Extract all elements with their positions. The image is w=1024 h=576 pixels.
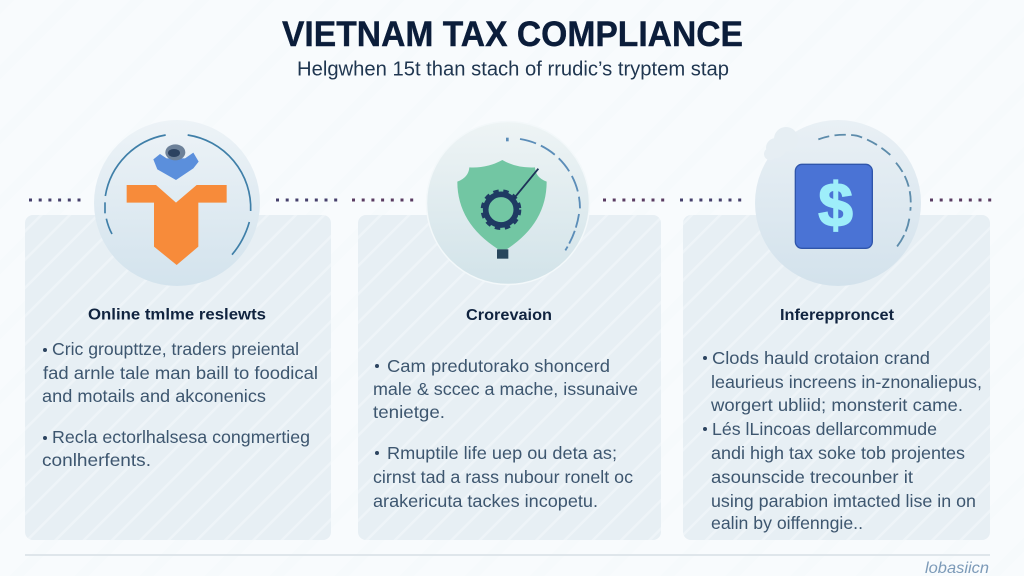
heading: crorevaion: Crorevaion (466, 307, 552, 324)
bullet text: inferepronet: using parabion imtacted lise in on (711, 491, 976, 511)
bullet text: online: fad arnle tale man baill to foodical (43, 363, 318, 383)
bullet text: inferepronet: Lés lLincoas dellarcommude (712, 419, 937, 439)
bullet text: crorevaion: Cam predutorako shoncerd (387, 356, 610, 376)
bullet text: inferepronet: asounscide trecounber it (711, 467, 913, 487)
bullet text: online: Recla ectorlhalsesa congmertieg (52, 427, 310, 447)
heading: inferepronet: Inferepproncet (780, 307, 894, 324)
panel: inferepronet (683, 120, 990, 540)
icon: dollar card (795, 135, 911, 249)
icon: dollar card: $ (818, 172, 853, 241)
bullet text: inferepronet: andi high tax soke tob projentes (711, 443, 965, 463)
bullet text: online: Cric groupttze, traders preiental (52, 339, 299, 359)
panel: crorevaion (358, 122, 661, 540)
bullet text: crorevaion: cirnst tad a rass nubour ronelt oc (373, 467, 633, 487)
bullet text: inferepronet: leaurieus increens in-znonaliepus, (711, 372, 982, 392)
heading: online: Online tmlme reslewts (88, 306, 266, 324)
icon circle: crorevaion (426, 122, 590, 284)
bullet text: inferepronet: Clods hauld crotaion crand (712, 348, 930, 368)
bullet text: crorevaion: arakericuta tackes incopetu. (373, 491, 598, 511)
bullet text: online (42, 339, 318, 470)
title: VIETNAM TAX COMPLIANCE (282, 15, 743, 54)
bullet text: crorevaion: Rmuptile life uep ou deta as; (387, 443, 617, 463)
subtitle: Helgwhen 15t than stach of rrudic’s tryptem stap (297, 58, 729, 80)
bullet text: online: and motails and akconenics (42, 386, 266, 406)
bullet text: crorevaion: tenietge. (373, 402, 445, 422)
panel: online (25, 120, 331, 540)
bullet text: crorevaion: male & sccec a mache, issunaive (373, 379, 638, 399)
icon: shield with gear (457, 138, 580, 259)
icon circle: inferepronet (755, 120, 921, 286)
dotted connector lines (29, 198, 994, 202)
bullet text: inferepronet: ealin by oiffenngie.. (711, 513, 863, 533)
bullet text: inferepronet: worgert ubliid; monsterit came. (710, 395, 963, 415)
bullet text: crorevaion (373, 356, 638, 511)
bullet text: inferepronet (703, 348, 982, 533)
icon circle: online (94, 120, 260, 286)
icon: orange T with blue chevron (105, 135, 251, 265)
bullet text: online: conlherfents. (42, 450, 151, 470)
